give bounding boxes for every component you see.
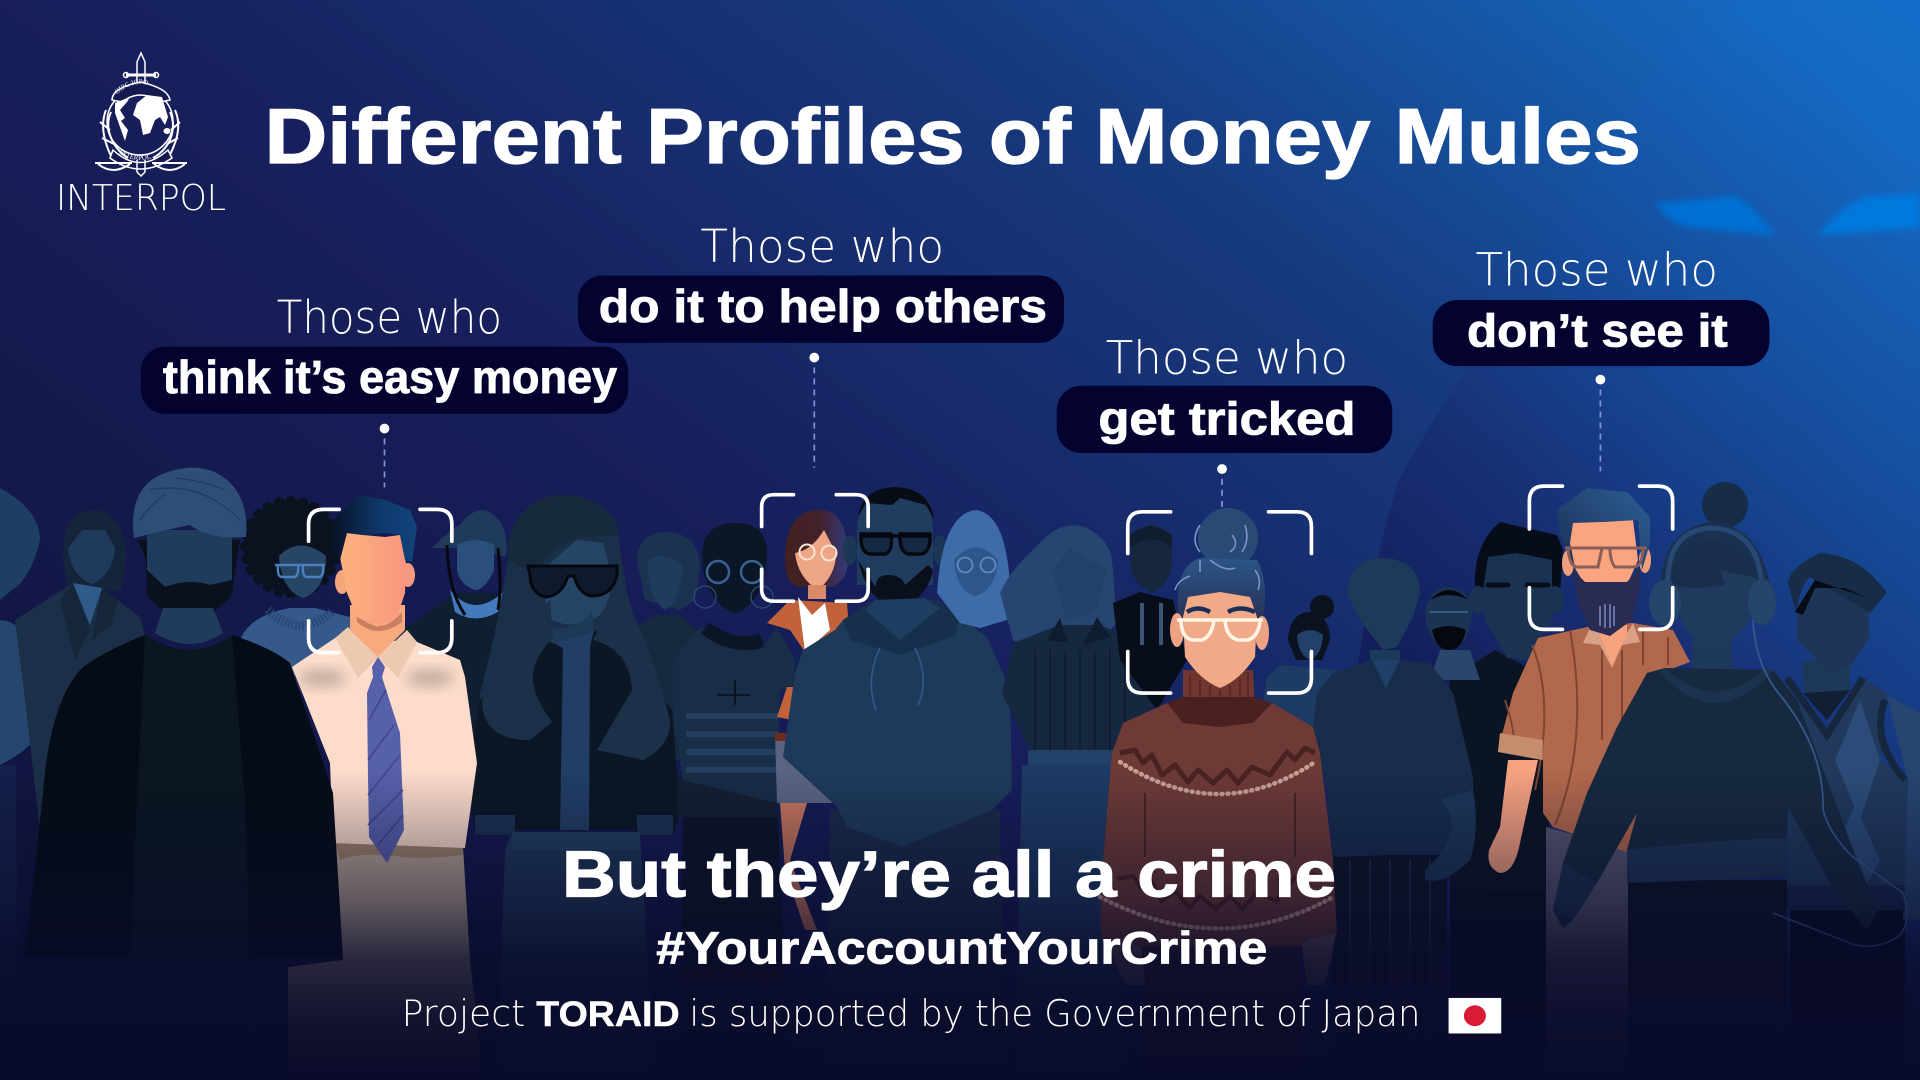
person: cap man in argyle vest — [1787, 553, 1920, 1080]
shadowy hooded figure — [1353, 0, 1920, 760]
support line — [402, 992, 1420, 1035]
person: highlighted bearded man in brown shirt — [1488, 488, 1690, 1080]
person: hoodie man with beard — [783, 487, 1012, 1080]
person: suited woman back left — [15, 510, 146, 880]
person: man in suit — [1313, 558, 1476, 1080]
hashtag: #YourAccountYourCrime — [656, 923, 1267, 974]
shirt — [292, 638, 477, 848]
face brackets: man with tie — [309, 509, 452, 653]
collar — [335, 627, 417, 678]
person: woman with round glasses and striped shirt — [673, 523, 795, 1080]
icon: emblem — [95, 51, 187, 177]
person: highlighted woman with blazer — [767, 510, 850, 930]
person: small bun woman — [1260, 595, 1337, 730]
title: Different Profiles of Money Mules — [264, 92, 1641, 180]
support line: TORAID — [536, 994, 680, 1034]
icon: glowing eye right — [1818, 193, 1920, 235]
icon: glowing eye left — [1656, 196, 1776, 235]
logo: INTERPOL — [56, 51, 226, 219]
callout: easy money: think it’s easy money — [163, 351, 617, 403]
person: cap woman with scarf — [403, 510, 522, 800]
trousers — [288, 843, 484, 1080]
person: small bearded man — [1425, 587, 1480, 680]
person: afro woman with glasses — [240, 501, 355, 680]
bottom fade overlay — [0, 770, 1920, 1080]
person: wavy hair woman in striped shirt — [1000, 525, 1153, 1080]
closing statement: But they’re all a crime — [562, 837, 1336, 910]
support line: Project — [402, 992, 525, 1035]
callout: get tricked — [1057, 331, 1392, 508]
callout: don't see it: don’t see it — [1467, 305, 1728, 357]
emblem lettering: OIPC ICPO — [114, 79, 148, 94]
callout: help others — [578, 220, 1064, 468]
tie — [367, 657, 404, 863]
callout: easy money: Those who — [277, 291, 502, 344]
person: beret woman in sunglasses — [470, 495, 680, 1080]
callout: help others: do it to help others — [599, 280, 1047, 332]
turtleneck — [1183, 670, 1255, 712]
person: woman with bun and headphones — [1553, 482, 1907, 1080]
support line: is supported by the Government of Japan — [689, 992, 1420, 1035]
person: highlighted man with tie — [288, 495, 484, 1080]
callout: don't see it — [1433, 243, 1769, 471]
person: highlighted woman with white glasses and sweater — [1100, 508, 1337, 1080]
person: far left woman — [0, 488, 48, 1000]
face brackets: woman with blazer — [762, 495, 868, 601]
callout: help others: Those who — [700, 220, 944, 273]
person: dark man in hoodie behind — [1113, 525, 1187, 710]
icon: emblem: INTERPOL — [119, 150, 151, 160]
face — [335, 570, 349, 594]
person: hijab woman — [937, 510, 1010, 628]
person: back woman curly — [633, 532, 705, 760]
callout: easy money — [141, 291, 628, 487]
icon: flag of Japan — [1449, 998, 1501, 1033]
wordmark: INTERPOL — [56, 178, 226, 219]
crowd of people — [0, 468, 1920, 1080]
face brackets: woman with sweater — [1128, 512, 1311, 693]
callout: get tricked: Those who — [1106, 331, 1348, 384]
hair — [330, 495, 417, 562]
face — [1170, 613, 1184, 647]
person: turban man in black coat — [25, 468, 343, 960]
hair — [1198, 508, 1258, 568]
callout: get tricked: get tricked — [1098, 393, 1356, 445]
face brackets: bearded man — [1529, 486, 1673, 629]
person: dark haired man in black hoodie — [1450, 522, 1564, 1080]
callout: don't see it: Those who — [1476, 243, 1718, 296]
